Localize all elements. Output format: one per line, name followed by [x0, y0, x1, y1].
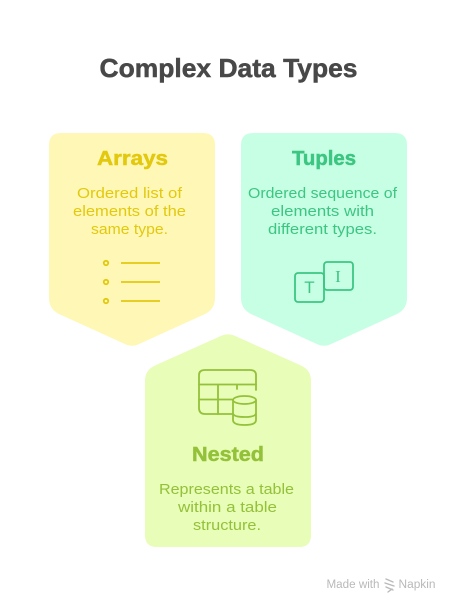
description: nested	[159, 481, 294, 534]
heading: arrays: Arrays	[97, 148, 168, 170]
description: tuples	[248, 185, 398, 238]
icon: bullet list	[104, 261, 160, 303]
icon: typed tuple boxes: I	[335, 267, 341, 286]
icon: typed tuple boxes: T	[304, 278, 315, 297]
description: nested: structure.	[193, 517, 261, 534]
description: tuples: elements with	[271, 203, 374, 220]
heading: nested: Nested	[192, 444, 264, 466]
description: arrays: Ordered list of	[77, 185, 183, 202]
panel: tuples	[241, 133, 407, 346]
description: tuples: Ordered sequence of	[248, 185, 398, 202]
description: arrays: same type.	[91, 221, 168, 238]
icon: typed tuple boxes	[295, 262, 353, 302]
heading: tuples: Tuples	[292, 148, 356, 170]
panel: arrays	[49, 133, 215, 346]
icon: table with database	[199, 370, 256, 425]
panel shape: nested	[145, 334, 311, 547]
description: nested: Represents a table	[159, 481, 294, 498]
panel shape: tuples	[241, 133, 407, 346]
title: Complex Data Types	[100, 53, 358, 83]
description: nested: within a table	[177, 499, 277, 516]
icon: napkin logo	[385, 579, 394, 592]
panel: nested	[145, 334, 311, 547]
description: tuples: different types.	[268, 221, 377, 238]
panel shape: arrays	[49, 133, 215, 346]
footer: made with napkin	[326, 579, 436, 592]
description: arrays	[73, 185, 186, 238]
footer: made with napkin: Made with	[326, 579, 380, 591]
footer: made with napkin: Napkin	[398, 579, 436, 591]
description: arrays: elements of the	[73, 203, 186, 220]
